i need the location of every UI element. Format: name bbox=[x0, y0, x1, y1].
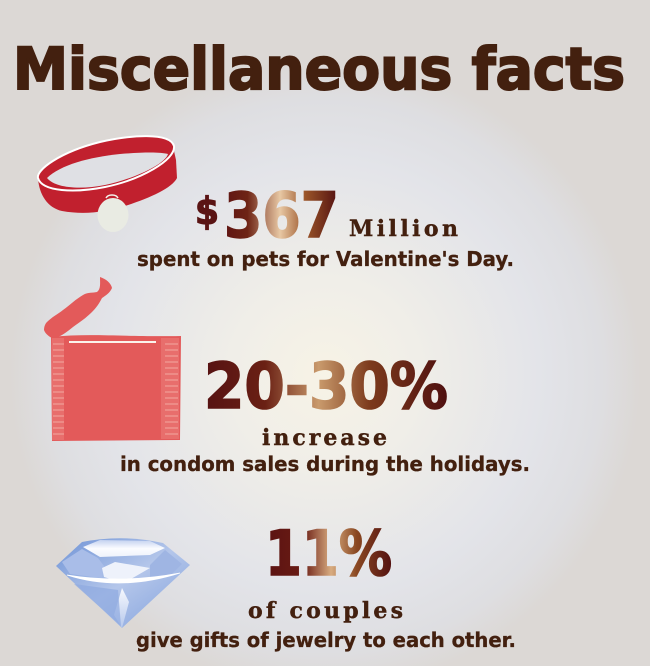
caption: condoms: in condom sales during the holidays. bbox=[120, 452, 530, 476]
wrapper torn flap bbox=[44, 277, 112, 338]
title: Miscellaneous facts bbox=[13, 35, 625, 103]
icon: red pet collar bbox=[38, 136, 177, 232]
stat: $367 Million bbox=[195, 179, 458, 252]
icon: diamond bbox=[56, 538, 190, 628]
phrase: of couples: of couples bbox=[248, 598, 403, 624]
icon: condom wrapper bbox=[44, 277, 181, 441]
icon: collar tag bbox=[98, 195, 128, 232]
word Million: Million bbox=[349, 216, 458, 242]
caption: pets: spent on pets for Valentine's Day. bbox=[137, 247, 514, 271]
stat: 11%: 11% bbox=[265, 517, 392, 590]
stat: 20-30%: 20-30% bbox=[204, 350, 448, 423]
word: increase: increase bbox=[262, 425, 387, 451]
number 367: 367 bbox=[224, 179, 339, 252]
caption: jewelry: give gifts of jewelry to each other. bbox=[136, 628, 516, 652]
dollar sign: $ bbox=[195, 190, 219, 233]
